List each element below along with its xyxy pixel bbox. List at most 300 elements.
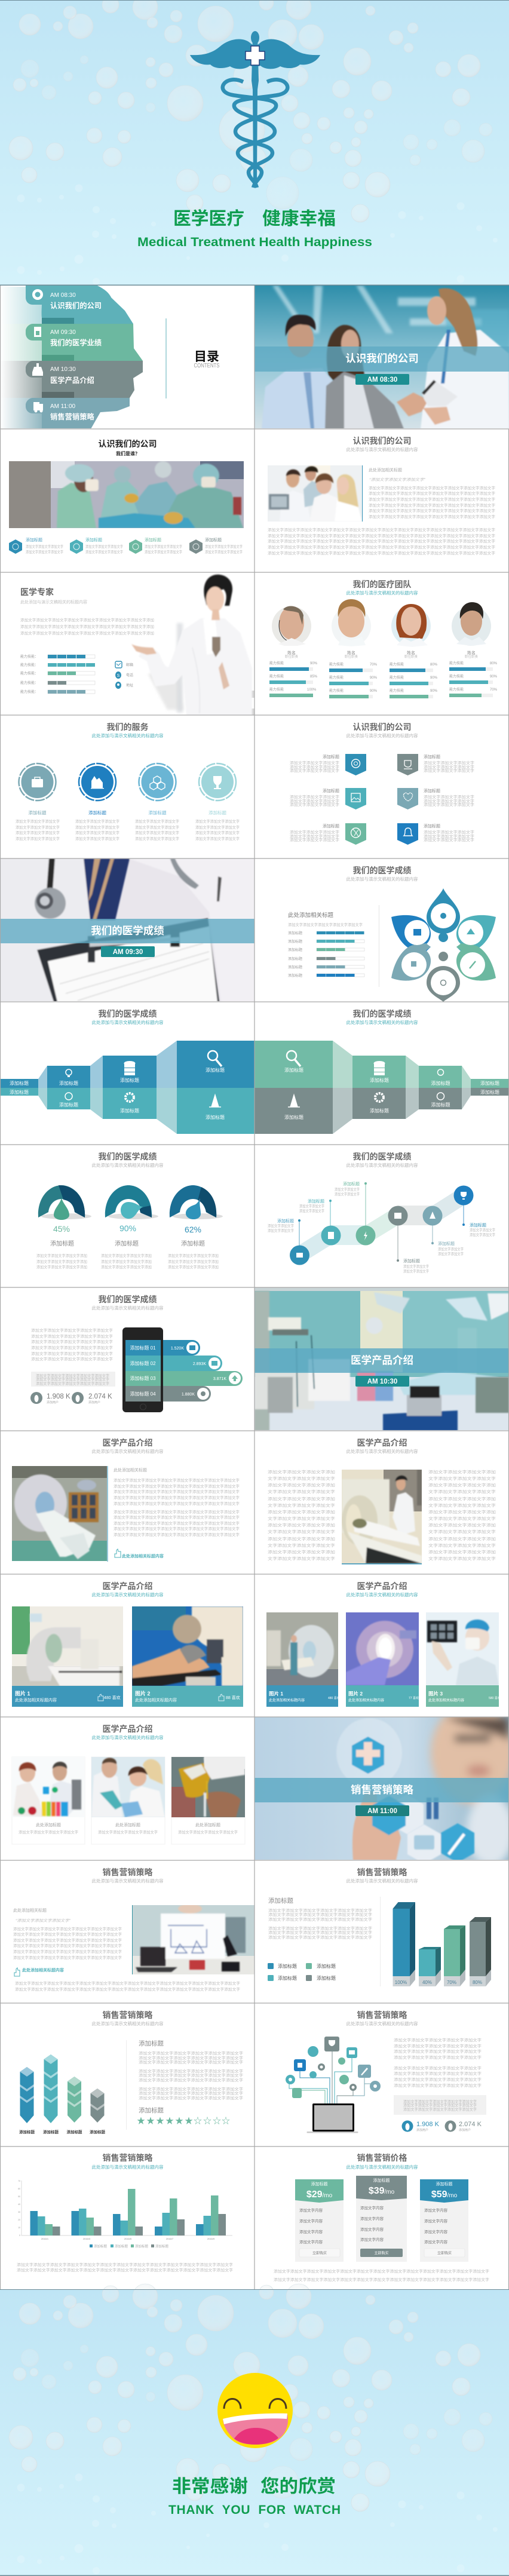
node labels: 添加文字添加文字: [438, 1246, 464, 1252]
section title: 销售营销策略: [351, 1784, 413, 1796]
node labels: 添加标题: [470, 1222, 486, 1228]
3D bars: 80%: [473, 1980, 482, 1985]
chart legend: 添加标题: [135, 2244, 149, 2249]
right labels: 添加标题: [370, 1077, 389, 1083]
progress bars: 添加标题: [288, 947, 302, 952]
column chart: 0: [19, 2234, 20, 2237]
card 1: 此处添加标题: [36, 1822, 61, 1827]
subtitle: 此处添加与演示文稿相关的标题内容: [92, 1591, 164, 1597]
menu item 2: [34, 327, 102, 347]
left half chart: [0, 1041, 254, 1134]
icons left: [65, 1051, 222, 1107]
column chart: 50: [18, 2195, 20, 2198]
service 4: 添加文字添加文字添加文字: [195, 824, 240, 830]
skill bars: [20, 654, 95, 694]
node labels: 添加文字添加文字: [403, 1264, 429, 1269]
title: 销售营销策略: [357, 1867, 407, 1877]
paragraph: 添加文字添加文字添加文字添加文字添加文字: [31, 1351, 114, 1356]
phone: 添加标题 03: [130, 1375, 156, 1381]
text block heading: 此处添加相关标题: [369, 467, 402, 473]
photo: MRI machine: [12, 1466, 107, 1561]
star rating: [137, 2116, 230, 2126]
gauge paragraphs: 添加文字添加文字添加文字添加: [36, 1253, 87, 1258]
gauge paragraphs: 添加文字添加文字添加文字添加: [36, 1259, 87, 1264]
right text column: 添加文字添加文字添加文字添加: [428, 1509, 496, 1514]
head silhouette menu: [0, 286, 143, 429]
chart legend: [90, 2244, 169, 2249]
service 2: 添加文字添加文字添加文字: [75, 818, 119, 824]
left labels: 添加标题: [206, 1067, 225, 1073]
node labels: 添加标题: [277, 1218, 294, 1223]
star rating: ☆: [222, 2116, 230, 2126]
paragraph 2: 添加文字添加文字添加文字添加文字添加文字: [394, 2083, 482, 2088]
3D bars: [393, 1902, 491, 1986]
team bars column 4: 90%: [490, 675, 498, 679]
paragraph 1: 添加文字添加文字添加文字添加文字添加文字: [394, 2054, 482, 2060]
subtitle: 此处添加与演示文稿相关的标题内容: [347, 1591, 418, 1597]
column chart: 2016/3: [83, 2237, 91, 2240]
left item 3: 添加文字添加文字添加文字: [290, 833, 340, 839]
menu item 1: 认识我们的公司: [50, 301, 102, 310]
slide: product intro text columns: [254, 1431, 509, 1574]
title: 销售营销策略: [103, 2153, 153, 2163]
chart legend: 添加标题: [155, 2244, 169, 2249]
node labels: 添加文字添加文字: [438, 1251, 464, 1256]
portrait 2: [332, 599, 371, 646]
caption 2: [346, 1685, 419, 1707]
card 1: 添加文字添加文字添加文字添加文字: [19, 1829, 78, 1835]
subtitle: 此处添加与演示文稿相关的标题内容: [92, 2020, 164, 2026]
star rating: ★: [137, 2116, 145, 2126]
time badge: AM 08:30: [367, 376, 397, 384]
paragraphs: 添加文字添加文字添加文字添加文字添加文字添加文字: [139, 2055, 244, 2060]
paragraph: [20, 617, 154, 636]
legend: 添加标题: [317, 1963, 336, 1969]
right labels: 添加标题: [480, 1080, 499, 1086]
stat 2: 添加用户: [459, 2128, 471, 2132]
subtitle: 此处添加与演示文稿相关的标题内容: [347, 1448, 418, 1454]
caption 2: 88 喜欢: [226, 1695, 240, 1700]
title second part: 健康幸福: [262, 209, 336, 229]
menu item 1: AM 08:30: [50, 292, 76, 299]
banner: [254, 1778, 509, 1802]
paragraph 2: 添加文字添加文字添加文字添加文字添加文字添加文字添加文字添加文字: [114, 1520, 240, 1526]
pills: [155, 1340, 243, 1402]
gray note box: [31, 1372, 115, 1387]
price column 3: $59/mo: [431, 2189, 458, 2200]
team bars column 4: 能力技能: [449, 687, 464, 692]
left text column: 添加文字添加文字添加文字添加: [268, 1549, 335, 1554]
card 2: 此处添加标题: [115, 1822, 140, 1827]
paragraph: 添加文字添加文字添加文字添加文字添加文字添加文字添加文字: [13, 1949, 122, 1954]
team bars column 1: 能力技能: [269, 674, 284, 679]
title: 认识我们的公司: [98, 439, 157, 449]
lower paragraph: 添加文字添加文字添加文字添加文字添加文字添加文字添加文字添加文字添加文字添加文字添加文字添加文字添加文字添加文字: [268, 533, 496, 538]
column chart: 10: [18, 2227, 20, 2229]
portrait 3: [391, 604, 431, 647]
right text column: 文字添加文字添加文字添加文字: [428, 1489, 496, 1494]
slide: product three photos: [254, 1574, 509, 1717]
caption 1: 此处添加相关标题内容: [269, 1698, 305, 1703]
caption 1: [12, 1686, 123, 1707]
skill bars: 能力技能：: [20, 671, 38, 676]
icon: caduceus emblem: [190, 31, 320, 188]
paragraph 1: 添加文字添加文字添加文字添加文字添加文字: [394, 2037, 482, 2043]
skill bars: 能力技能：: [20, 689, 38, 694]
subtitle: 此处添加与演示文稿相关的标题内容: [347, 876, 418, 882]
left item 2: 添加文字添加文字添加文字: [290, 802, 340, 807]
paragraph 1: 添加文字添加文字添加文字添加文字添加文字添加文字: [268, 1912, 373, 1917]
legend: 添加标题: [278, 1975, 297, 1981]
price column 1: 添加文字内容: [299, 2218, 323, 2224]
price column 2: 添加文字内容: [360, 2237, 384, 2242]
legend: 添加标题: [317, 1975, 336, 1981]
paragraph: 添加文字添加文字添加文字添加文字添加文字添加文字添加文字添加文字: [369, 485, 496, 490]
team bars column 3: 90%: [430, 689, 438, 693]
paragraph: 添加文字添加文字添加文字添加文字添加文字添加文字添加文字添加文字: [369, 496, 496, 502]
feature 2: 添加文字添加文字添加文字: [85, 544, 123, 549]
left item 1: 添加文字添加文字添加文字: [290, 760, 340, 765]
column chart: 2016/5: [124, 2237, 132, 2240]
paragraph 2: 添加文字添加文字添加文字添加文字添加文字添加文字添加文字添加文字: [114, 1526, 240, 1531]
lower paragraph: [15, 1980, 241, 1992]
subtitle right: 此处添加与演示文稿相关的标题内容: [347, 1019, 418, 1025]
caption 3: [426, 1685, 501, 1707]
column 1: [20, 2067, 33, 2123]
price column 1: $29/mo: [306, 2189, 333, 2200]
service 1: 添加文字添加文字添加文字: [16, 830, 60, 835]
paragraph 1: [268, 1908, 373, 1922]
gauge captions: 45%: [53, 1224, 70, 1234]
caption 2: 图片 2: [348, 1691, 363, 1697]
price column 1: [295, 2179, 344, 2262]
slide: section 3 photo: [254, 1287, 509, 1431]
slide: product intro one photo: [0, 1431, 254, 1574]
skill bars: 能力技能：: [20, 663, 38, 667]
photo: finger touching medical hexagons: [254, 1702, 509, 1866]
feature 3: [129, 537, 182, 554]
left item 3: 添加标题: [323, 823, 339, 829]
subtitle: 此处添加与演示文稿相关的标题内容: [347, 1878, 418, 1884]
title: 销售营销策略: [357, 2010, 407, 2020]
paragraph: 添加文字添加文字添加文字添加文字添加文字添加文字添加文字: [13, 1926, 122, 1931]
paragraphs: 添加文字添加文字添加文字添加文字添加文字添加文字: [139, 2077, 244, 2083]
progress bars: 添加标题: [288, 965, 302, 970]
team bars column 4: 能力技能: [449, 674, 464, 679]
section title: 医学产品介绍: [351, 1354, 413, 1366]
stat 2: [72, 1392, 112, 1404]
team bars column 1: 100%: [307, 688, 317, 692]
title: 医学产品介绍: [357, 1581, 407, 1591]
lower paragraph: [17, 2262, 234, 2273]
photo: operating room: [254, 1287, 509, 1431]
node labels: 添加标题: [308, 1198, 324, 1204]
timeline ribbon: [299, 1186, 464, 1265]
team bars column 4: 能力技能: [449, 661, 464, 666]
banner: [254, 346, 509, 372]
right item 2: 添加文字添加文字添加文字: [424, 794, 475, 799]
3D bars: 40%: [422, 1980, 432, 1985]
gauge captions: 添加标题: [115, 1240, 139, 1247]
paragraphs: [139, 2050, 244, 2100]
right text column: [428, 1469, 496, 1561]
right item 3: [397, 823, 475, 845]
right item 2: 添加文字添加文字添加文字: [424, 798, 475, 804]
right labels: 添加标题: [431, 1102, 450, 1108]
pills: 1.520K: [171, 1347, 184, 1351]
paragraph 1: 添加文字添加文字添加文字添加文字添加文字添加文字: [268, 1908, 373, 1913]
caption 2: [132, 1686, 243, 1707]
team bars column 3: [390, 662, 438, 698]
stat 1: 添加用户: [416, 2128, 428, 2132]
card 2: [91, 1757, 165, 1844]
title: 我们的医学成绩: [98, 1152, 157, 1161]
right half chart: [254, 1041, 509, 1134]
price column 3: 立即购买: [437, 2251, 452, 2256]
subtitle left: 此处添加与演示文稿相关的标题内容: [92, 1019, 164, 1025]
stat 2: [444, 2121, 482, 2132]
progress bars: [288, 931, 364, 978]
paragraph 2: 添加文字添加文字添加文字添加文字添加文字: [394, 2077, 482, 2082]
heading: 添加标题: [268, 1897, 293, 1905]
paragraph 1: 添加文字添加文字添加文字添加文字添加文字: [394, 2048, 482, 2054]
price column 2: 添加标题: [373, 2178, 390, 2183]
team bars column 3: 能力技能: [390, 662, 404, 667]
team bars column 2: 70%: [370, 663, 378, 667]
star rating: ★: [175, 2116, 183, 2126]
node labels: 添加文字添加文字: [299, 1208, 324, 1213]
stem dots: [298, 1182, 465, 1262]
closing slide: [0, 2284, 509, 2576]
feature 1: 添加标题: [26, 537, 42, 542]
feature 4: 添加标题: [205, 537, 222, 542]
paragraph 1: 添加文字添加文字添加文字添加文字添加文字添加文字添加文字添加文字: [114, 1501, 240, 1506]
paragraph: 添加文字添加文字添加文字添加文字添加文字: [31, 1333, 114, 1339]
paragraph: 添加文字添加文字添加文字添加文字添加文字添加文字添加文字添加文字: [369, 490, 496, 496]
gray note box: 添加文字添加文字添加文字添加文字添加文字: [403, 2099, 477, 2104]
right item 3: 添加文字添加文字添加文字: [424, 833, 475, 839]
feature 2: 添加标题: [85, 537, 102, 542]
caption 2: 77 喜欢: [409, 1696, 419, 1700]
stat 2: 添加用户: [88, 1400, 100, 1404]
gauge 45%: [38, 1185, 91, 1220]
team bars column 2: 能力技能: [329, 675, 344, 680]
team bars column 4: 70%: [490, 688, 498, 692]
service 4: 添加文字添加文字添加文字: [195, 830, 240, 835]
paragraph: [369, 485, 496, 519]
left text column: 添加文字添加文字添加文字添加: [268, 1482, 335, 1488]
node labels: 添加文字添加文字: [299, 1203, 324, 1209]
column labels: 添加标题: [19, 2129, 35, 2135]
team bars column 1: 能力技能: [269, 687, 284, 692]
time badge: AM 10:30: [367, 1378, 397, 1385]
thumbs-up note: [115, 1549, 164, 1559]
left text column: 文字添加文字添加文字添加文字: [268, 1476, 336, 1481]
price column 1: 添加文字内容: [299, 2239, 323, 2244]
paragraph 2: 添加文字添加文字添加文字添加文字添加文字添加文字: [268, 1934, 373, 1940]
caption 1: 此处添加相关标题内容: [15, 1697, 57, 1703]
left item 1: [290, 754, 366, 775]
title: 认识我们的公司: [352, 436, 411, 446]
heading: 此处添加相关标题: [114, 1467, 147, 1473]
price column 1: 立即购买: [312, 2251, 327, 2256]
slide: column chart: [0, 2146, 254, 2289]
node labels: 添加文字添加文字: [470, 1227, 495, 1232]
left item 2: 添加文字添加文字添加文字: [290, 794, 340, 799]
stat 2: 2.074 K: [88, 1393, 112, 1400]
service 3: 添加文字添加文字添加文字: [135, 818, 179, 824]
column labels: [19, 2129, 105, 2135]
stat 1: [401, 2121, 440, 2132]
subtitle: 此处添加与演示文稿相关的标题内容: [92, 1448, 164, 1454]
feature 2: [70, 537, 123, 554]
left text column: 添加文字添加文字添加文字添加: [268, 1509, 335, 1514]
right labels: 添加标题: [284, 1067, 303, 1073]
price column 1: 添加标题: [311, 2181, 327, 2186]
title: 医学医疗: [173, 209, 244, 229]
right text column: 文字添加文字添加文字添加文字: [428, 1516, 496, 1521]
pills: 1.880K: [182, 1393, 195, 1397]
team bars column 1: 90%: [310, 662, 318, 666]
right item 1: 添加文字添加文字添加文字: [424, 764, 475, 769]
column 4: [91, 2089, 104, 2123]
column chart: 70: [18, 2180, 20, 2182]
portrait 1: [272, 606, 311, 646]
paragraph: 添加文字添加文字添加文字添加文字添加文字添加文字添加文字添加文字: [369, 502, 496, 508]
slide: section 2 photo: [0, 858, 254, 1002]
subtitle: 此处添加与演示文稿相关的标题内容: [92, 1878, 164, 1884]
paragraph 1: 添加文字添加文字添加文字添加文字添加文字添加文字添加文字添加文字: [114, 1495, 240, 1500]
flower diagram: [391, 888, 496, 1002]
title left: 我们的医学成绩: [98, 1009, 157, 1019]
photo: doctors with x-ray: [268, 465, 362, 522]
paragraph 2: [394, 2065, 482, 2088]
rating heading: 添加标题: [139, 2106, 164, 2114]
feature 4: 添加文字添加文字添加文字: [205, 549, 243, 554]
slide: contents: [3, 286, 220, 428]
team bars column 2: 90%: [370, 676, 378, 680]
caption 1: [266, 1685, 340, 1707]
stat 1: 1.908 K: [47, 1393, 70, 1400]
right text column: 文字添加文字添加文字添加文字: [428, 1502, 496, 1508]
chart legend: 添加标题: [115, 2244, 128, 2249]
paragraph: 添加文字添加文字添加文字添加文字添加文字添加文字添加文字添加文字: [369, 508, 496, 513]
paragraph: 添加文字添加文字添加文字添加文字添加文字: [31, 1356, 114, 1361]
service 4: 添加文字添加文字添加文字: [195, 836, 240, 841]
paragraphs: 添加文字添加文字添加文字添加文字添加文字添加文字: [139, 2095, 244, 2100]
gray note box: 添加文字添加文字添加文字添加文字添加文字: [36, 1376, 109, 1382]
service 1: 添加文字添加文字添加文字: [16, 836, 60, 841]
team member labels: 姓名: [407, 650, 415, 655]
card 3: [171, 1757, 245, 1844]
tree connectors: [289, 2044, 371, 2103]
3D bars: 70%: [447, 1980, 456, 1985]
team member labels: 职位职责: [285, 654, 298, 659]
title: 医学产品介绍: [357, 1438, 407, 1448]
feature 3: 添加文字添加文字添加文字: [145, 549, 182, 554]
icon: laughing smiley: [217, 2373, 293, 2448]
team bars column 1: 85%: [310, 675, 318, 679]
skill bars: 能力技能：: [20, 654, 38, 659]
chart legend: 添加标题: [94, 2244, 108, 2249]
section title: 认识我们的公司: [345, 352, 419, 364]
team bars column 3: 90%: [430, 676, 438, 680]
gray note box: [394, 2095, 486, 2115]
slide: medical expert: [0, 572, 254, 716]
right item 1: 添加文字添加文字添加文字: [424, 760, 475, 765]
contact icons: 邮箱: [126, 663, 133, 667]
left item 3: 添加文字添加文字添加文字: [290, 829, 340, 835]
tree icons: [286, 2037, 381, 2098]
right text column: 添加文字添加文字添加文字添加: [428, 1549, 496, 1554]
paragraph 2: 添加文字添加文字添加文字添加文字添加文字添加文字添加文字添加文字: [114, 1509, 240, 1514]
slide: our services: [0, 715, 254, 858]
quote: “添加文字添加文字添加文字”: [16, 1918, 71, 1923]
price column 3: 添加标题: [436, 2181, 453, 2186]
team bars column 4: [449, 661, 498, 697]
photo: surgical team: [9, 461, 244, 528]
paragraph 1: 添加文字添加文字添加文字添加文字添加文字添加文字: [268, 1916, 373, 1922]
node labels: 添加标题: [343, 1181, 360, 1186]
paragraph 2: [114, 1509, 240, 1537]
paragraphs: 添加文字添加文字添加文字添加文字添加文字添加文字: [139, 2086, 244, 2092]
menu item 3: AM 10:30: [50, 366, 76, 373]
closing title: 非常感谢: [172, 2477, 248, 2497]
left labels: 添加标题: [120, 1077, 139, 1083]
timeline nodes: [290, 1185, 473, 1265]
left labels: 添加标题: [10, 1080, 29, 1086]
gauge captions: 添加标题: [50, 1240, 74, 1247]
team bars column 2: [329, 662, 378, 698]
right item 1: 添加文字添加文字添加文字: [424, 768, 475, 773]
thumbs-up note: 此处添加相关标题内容: [22, 1967, 64, 1973]
team member labels: [285, 650, 478, 659]
contact icons: S: [117, 674, 120, 678]
title: 我们的医学成绩: [352, 866, 411, 875]
closing english: THANK YOU FOR WATCH: [168, 2503, 341, 2517]
star rating: ☆: [213, 2116, 221, 2126]
feature 3: 添加标题: [145, 537, 161, 542]
gauge captions: 62%: [185, 1225, 201, 1234]
title: 我们的医学成绩: [98, 1295, 157, 1304]
slide pair: achievements butterfly chart: [0, 1002, 509, 1145]
slide: who we are: [0, 429, 254, 572]
left labels: 添加标题: [206, 1114, 225, 1120]
left text column: 文字添加文字添加文字添加文字: [268, 1542, 336, 1548]
paragraph 2: 添加文字添加文字添加文字添加文字添加文字添加文字添加文字添加文字: [114, 1514, 240, 1520]
service 3: [135, 763, 179, 841]
service 4: 添加文字添加文字添加文字: [195, 818, 240, 824]
gauge 90%: [105, 1185, 158, 1219]
team bars column 2: 能力技能: [329, 688, 344, 693]
left labels: [10, 1067, 225, 1120]
time badge: AM 11:00: [367, 1808, 397, 1815]
left text column: 文字添加文字添加文字添加文字: [268, 1489, 336, 1494]
gray note box: 添加文字添加文字添加文字添加文字添加文字: [403, 2102, 477, 2108]
paragraphs: 添加文字添加文字添加文字添加文字添加文字添加文字: [139, 2059, 244, 2065]
subtitle: 此处添加与演示文稿相关的标题内容: [92, 2164, 164, 2170]
right text column: 文字添加文字添加文字添加文字: [428, 1542, 496, 1548]
slide: achievements flower: [254, 858, 509, 1002]
photo: purple scanner: [346, 1612, 419, 1685]
photo: CT scan with patient: [342, 1470, 422, 1563]
card 3: 添加文字添加文字添加文字添加文字: [178, 1829, 238, 1835]
title: 销售营销策略: [103, 1867, 153, 1877]
lower paragraph: 添加文字添加文字添加文字添加文字添加文字添加文字添加文字添加文字添加文字添加文字添加文字添加文字添加文字添加文字: [15, 1980, 241, 1986]
caption 3: 此处添加相关标题内容: [428, 1698, 464, 1703]
slide: product two photos: [0, 1574, 254, 1717]
legend: [268, 1963, 336, 1981]
